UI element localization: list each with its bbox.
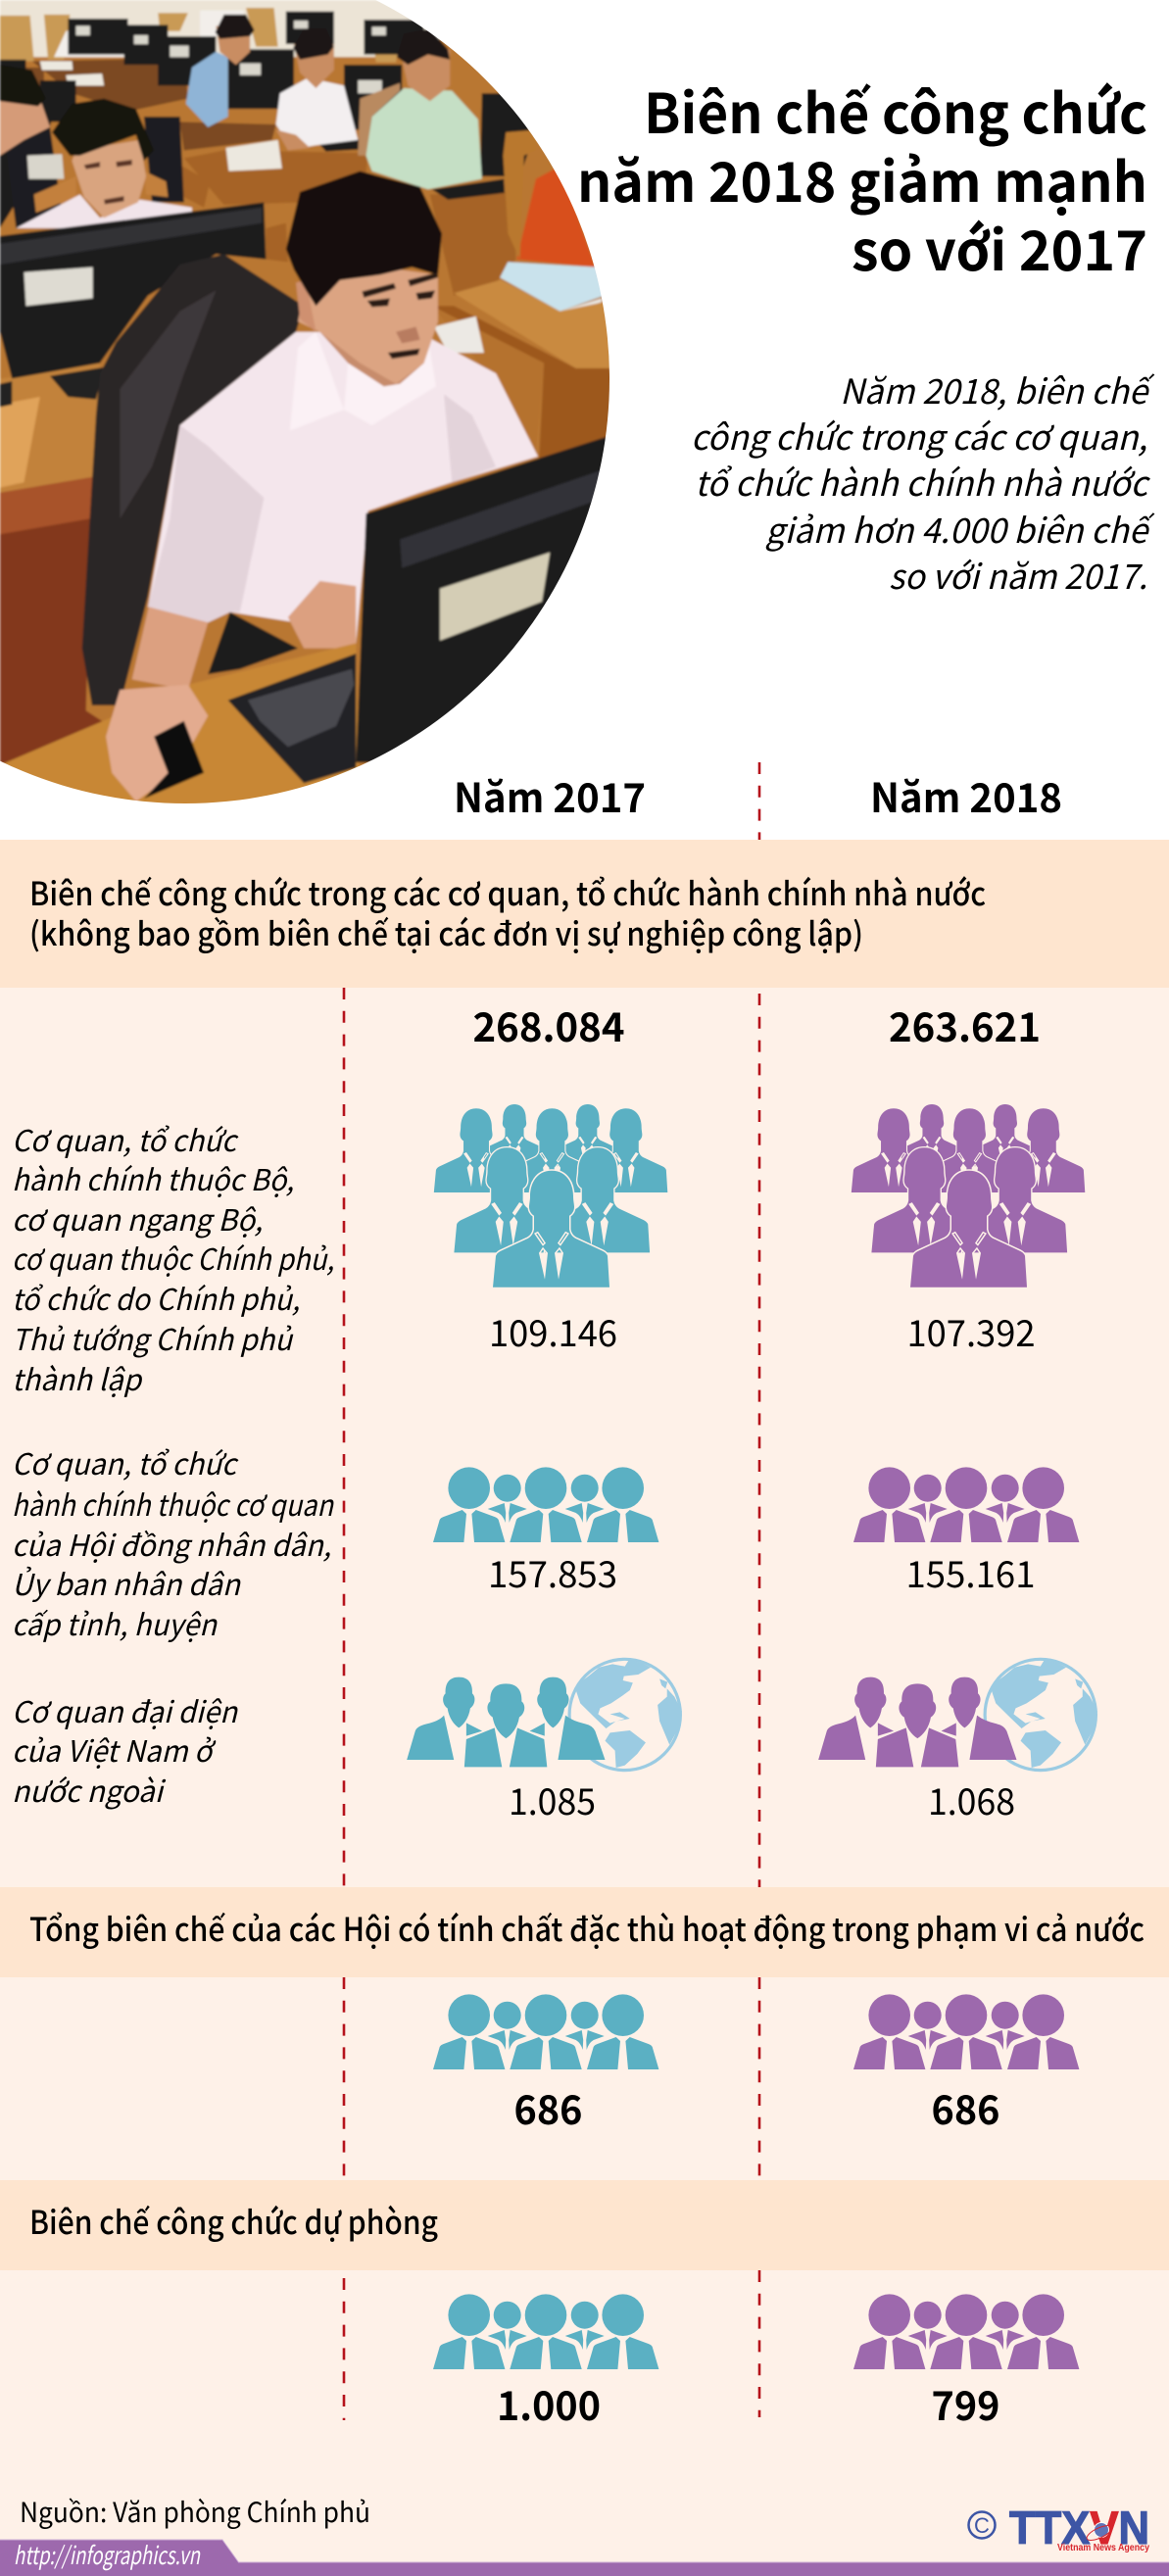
band: section 2 heading	[0, 1887, 1169, 1977]
title	[577, 71, 1147, 287]
icon: team 2017	[433, 1994, 658, 2069]
row 2 label: cấp tỉnh, huyện	[12, 1601, 219, 1644]
section 2 values	[513, 2077, 999, 2136]
row 2 label: Ủy ban nhân dân	[12, 1561, 242, 1604]
page background	[0, 840, 1169, 2576]
icon: team 2018	[853, 2294, 1079, 2369]
row 1 label: Cơ quan, tổ chức	[12, 1117, 239, 1160]
section 3 values	[497, 2373, 999, 2432]
row 2 label: Cơ quan, tổ chức	[12, 1440, 239, 1483]
intro text: so với năm 2017.	[889, 550, 1147, 600]
icon: team 2018	[853, 1467, 1079, 1542]
logo: TTXVN: TTXVN	[1009, 2502, 1149, 2553]
row 1 label: cơ quan ngang Bộ,	[12, 1196, 263, 1239]
row 1 values: 107.392	[907, 1304, 1035, 1357]
logo: TTXVN: C	[974, 2513, 990, 2538]
section 3 values: 799	[931, 2373, 999, 2432]
row 1 values	[489, 1304, 1035, 1357]
icon: crowd 2017	[434, 1104, 667, 1288]
icon: crowd 2018	[852, 1104, 1085, 1288]
row 3 values: 1.068	[928, 1773, 1015, 1825]
column headings: Năm 2018	[870, 765, 1062, 824]
intro text	[691, 365, 1155, 600]
row 1 label: cơ quan thuộc Chính phủ,	[12, 1236, 334, 1279]
intro text: công chức trong các cơ quan,	[691, 411, 1147, 461]
band: section 1 heading: (không bao gồm biên chế tại các đơn vị sự nghiệp công lập)	[29, 908, 863, 955]
row 3 values	[509, 1773, 1015, 1825]
icon: team 2017	[433, 1467, 658, 1542]
band: section 3 heading: Biên chế công chức dự phòng	[29, 2197, 438, 2244]
totals row	[472, 995, 1041, 1053]
row 2 label: của Hội đồng nhân dân,	[12, 1522, 331, 1565]
source: Nguồn: Văn phòng Chính phủ	[20, 2492, 370, 2531]
row 2 values	[488, 1545, 1035, 1598]
row 3 label: nước ngoài	[12, 1768, 167, 1811]
row 1 label: Thủ tướng Chính phủ	[12, 1316, 294, 1359]
row 3 values: 1.085	[509, 1773, 596, 1825]
intro text: Năm 2018, biên chế	[840, 365, 1154, 414]
section 2 values: 686	[513, 2077, 582, 2136]
icon: diplomats and globe 2018	[818, 1659, 1097, 1771]
section 3 values: 1.000	[497, 2373, 601, 2432]
footer strip with URL	[0, 2537, 1169, 2576]
row 2 values: 155.161	[905, 1545, 1035, 1598]
title: Biên chế công chức	[644, 71, 1147, 150]
band: section 1 heading	[0, 840, 1169, 988]
title: năm 2018 giảm mạnh	[577, 139, 1147, 219]
band: section 1 heading: Biên chế công chức trong các cơ quan, tổ chức hành chính nhà nước	[29, 868, 986, 915]
row 1 label	[12, 1117, 334, 1399]
intro text: tổ chức hành chính nhà nước	[695, 457, 1150, 507]
row 1 label: thành lập	[12, 1356, 143, 1399]
logo: TTXVN: Vietnam News Agency	[1057, 2542, 1149, 2553]
row 3 label: của Việt Nam ở	[12, 1727, 217, 1771]
red dashed column dividers	[344, 762, 759, 2420]
row 2 label	[12, 1440, 335, 1644]
column headings: Năm 2017	[454, 765, 646, 824]
band: section 3 heading	[0, 2180, 1169, 2270]
column headings	[454, 765, 1062, 824]
row 1 label: tổ chức do Chính phủ,	[12, 1276, 300, 1319]
row 2 values: 157.853	[488, 1545, 617, 1598]
icon: diplomats and globe 2017	[407, 1659, 682, 1771]
footer strip with URL: http://infographics.vn	[14, 2537, 201, 2572]
icon: team 2018	[853, 1994, 1079, 2069]
row 3 label	[12, 1688, 239, 1811]
section 2 values: 686	[931, 2077, 999, 2136]
row 1 values: 109.146	[489, 1304, 617, 1357]
intro text: giảm hơn 4.000 biên chế	[765, 504, 1155, 554]
title: so với 2017	[852, 208, 1147, 287]
totals row: 263.621	[889, 995, 1041, 1053]
row 1 label: hành chính thuộc Bộ,	[12, 1156, 294, 1199]
row 3 label: Cơ quan đại diện	[12, 1688, 239, 1731]
photo: civil servants at computers in a circle crop	[0, 0, 627, 813]
row 2 label: hành chính thuộc cơ quan	[12, 1482, 335, 1525]
totals row: 268.084	[472, 995, 625, 1053]
icon: team 2017	[433, 2294, 658, 2369]
